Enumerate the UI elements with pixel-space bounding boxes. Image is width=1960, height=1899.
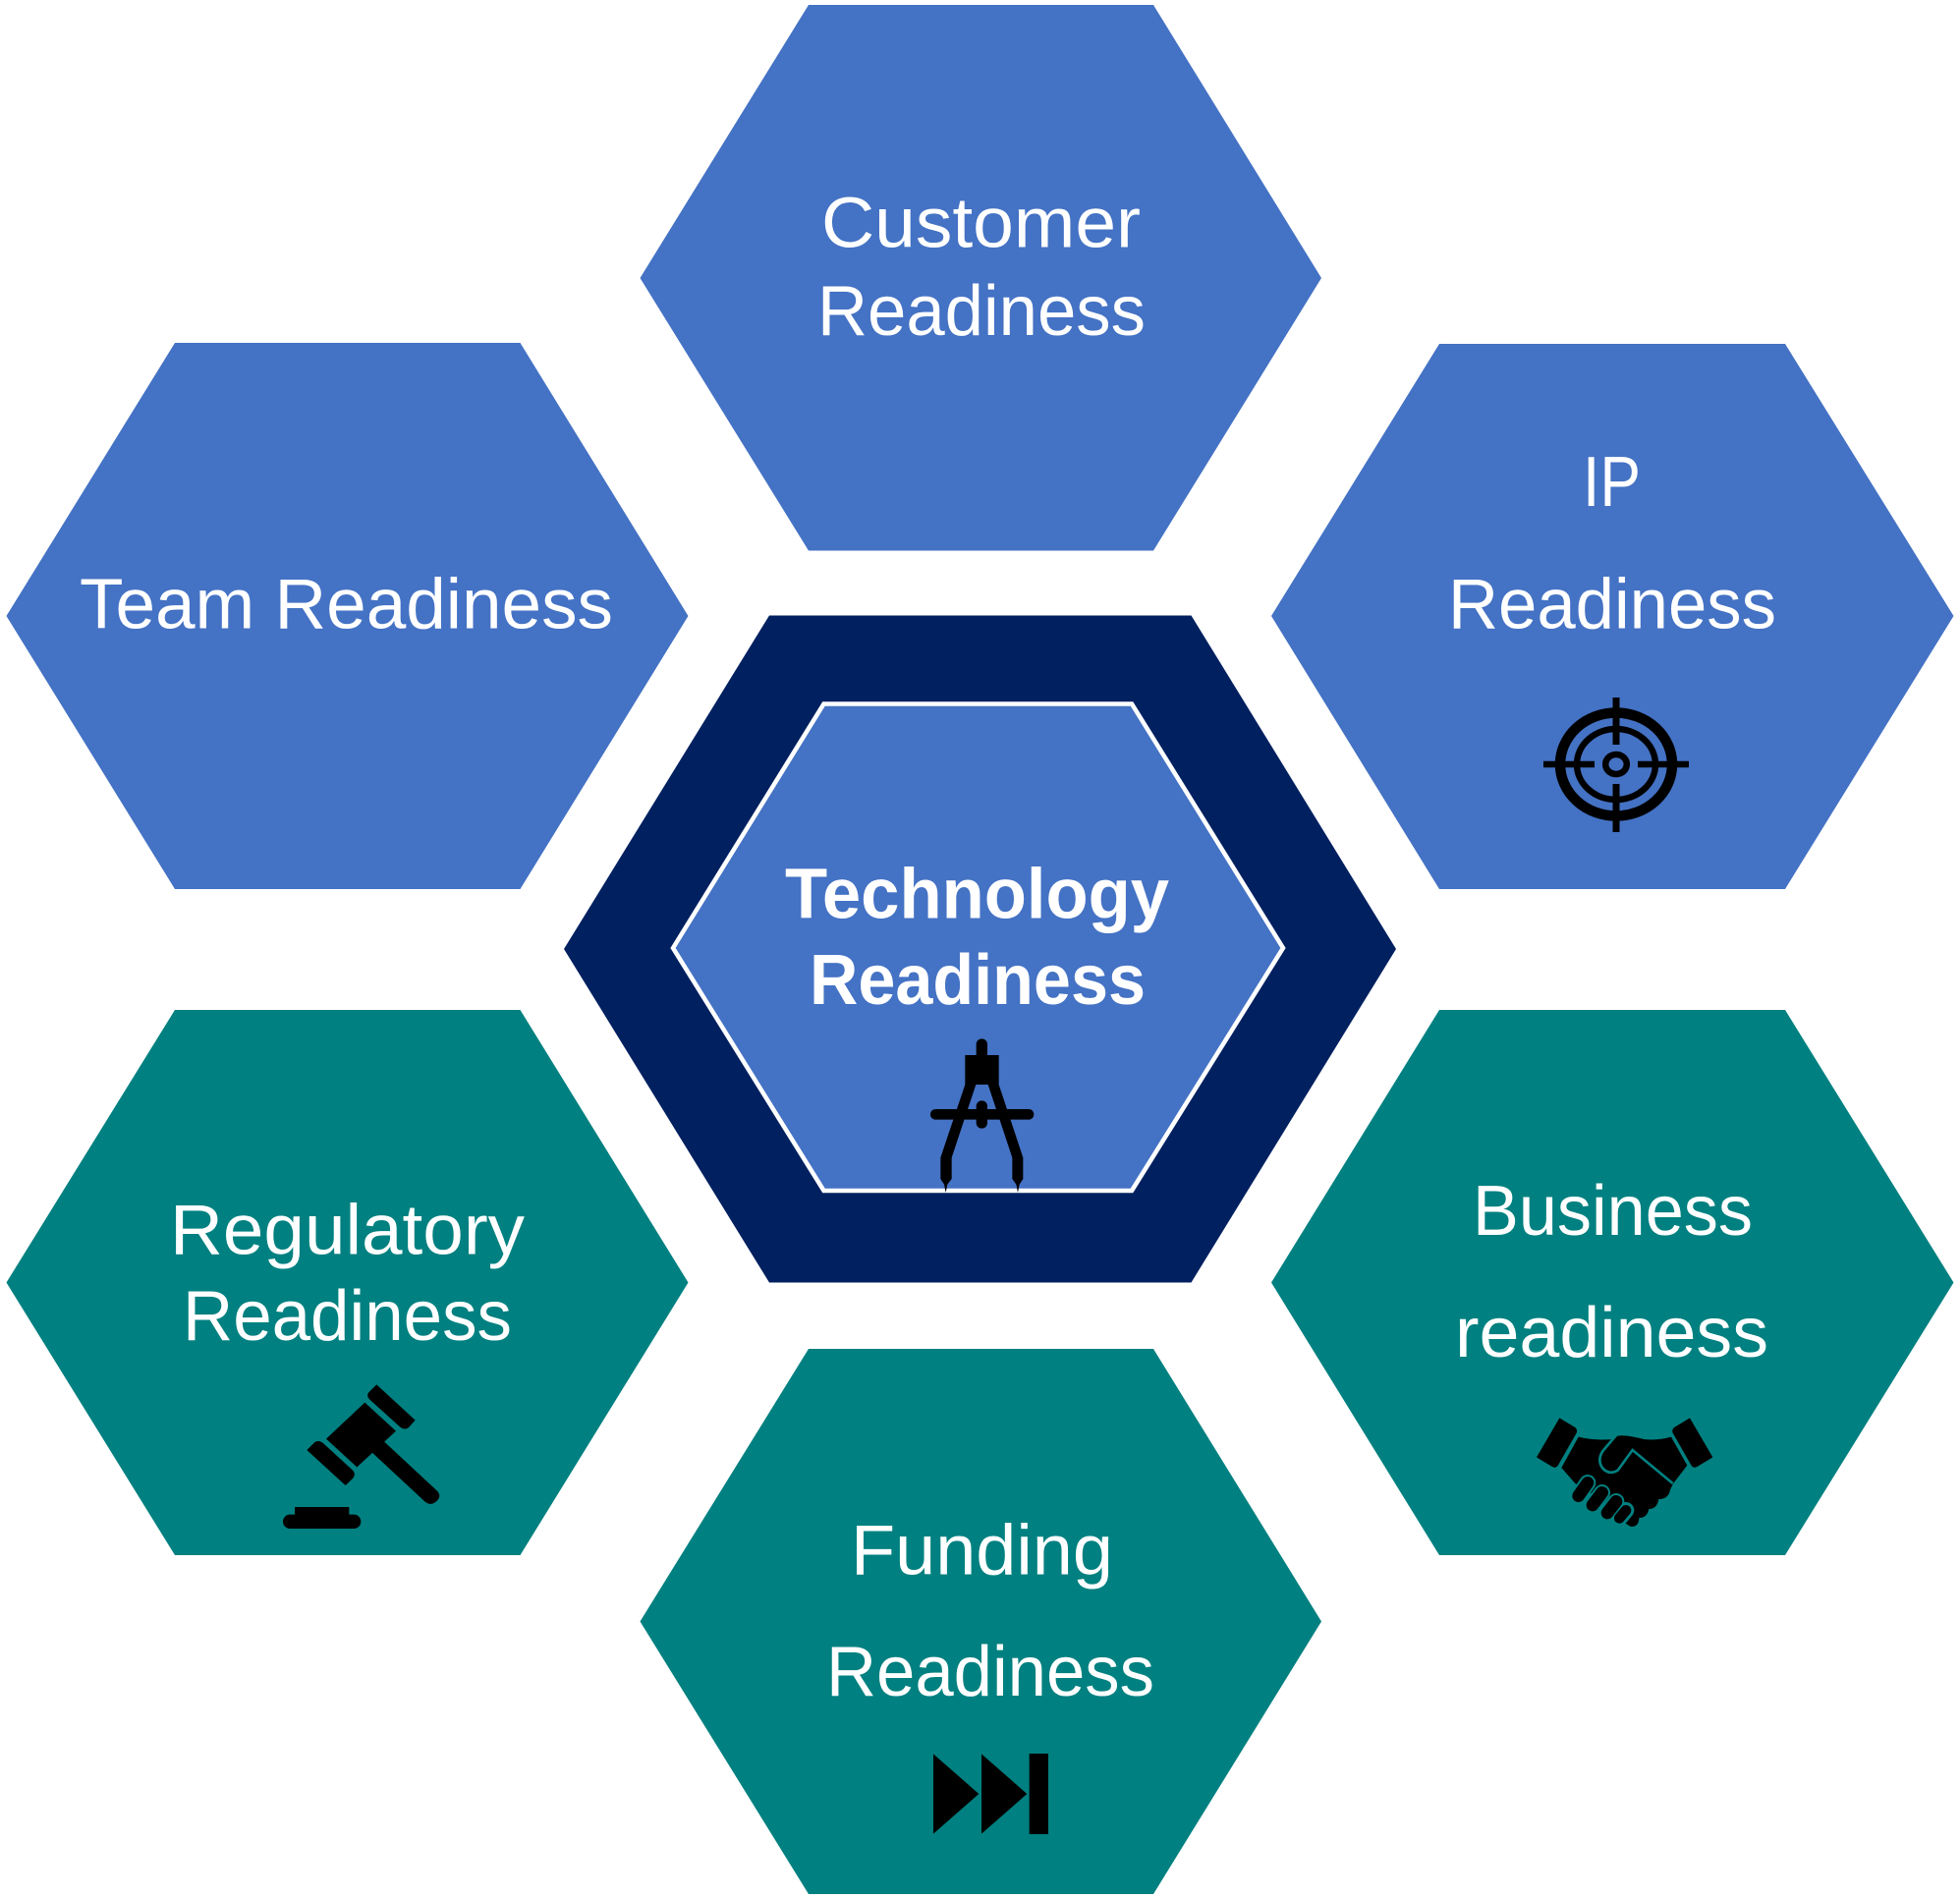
- label: IP readiness: Readiness: [1448, 566, 1776, 644]
- panel: regulatory readiness: [6, 1010, 688, 1555]
- panel: business readiness: [1271, 1010, 1953, 1555]
- label: customer readiness: Customer: [821, 185, 1141, 263]
- label: customer readiness: [817, 185, 1146, 351]
- icon: fast forward: [933, 1754, 1048, 1834]
- panel: technology readiness: [564, 615, 1396, 1283]
- label: business readiness: [1455, 1172, 1768, 1372]
- label: funding readiness: [826, 1511, 1154, 1711]
- icon: target crosshair: [1543, 698, 1689, 832]
- label: funding readiness: Readiness: [826, 1633, 1154, 1711]
- hexagon: IP: [1271, 344, 1953, 889]
- label: business readiness: readiness: [1455, 1294, 1768, 1372]
- hexagon: outer navy: [564, 615, 1396, 1283]
- label: business readiness: Business: [1473, 1172, 1753, 1251]
- label: team readiness: Team Readiness: [80, 566, 613, 644]
- hexagon: customer: [641, 5, 1321, 550]
- panel: customer readiness: [641, 5, 1321, 550]
- label: technology readiness: Technology: [785, 855, 1169, 933]
- panel: funding readiness: [641, 1349, 1321, 1894]
- hexagon: team: [6, 343, 688, 889]
- label: customer readiness: Readiness: [817, 272, 1146, 351]
- panel: team readiness: [6, 343, 688, 889]
- panel: IP readiness: [1271, 344, 1953, 889]
- label: IP readiness: [1448, 443, 1776, 644]
- label: IP readiness: IP: [1583, 443, 1641, 522]
- label: funding readiness: Funding: [851, 1511, 1113, 1590]
- label: regulatory readiness: Readiness: [183, 1277, 512, 1356]
- label: technology readiness: [785, 855, 1169, 1020]
- icon: gavel: [283, 1384, 439, 1529]
- hexagon: inner blue: [673, 703, 1283, 1191]
- hexagon: business: [1271, 1010, 1953, 1555]
- label: technology readiness: Readiness: [810, 941, 1146, 1020]
- label: regulatory readiness: [170, 1191, 525, 1356]
- hexagon: funding: [641, 1349, 1321, 1894]
- icon: drafting compass: [930, 1038, 1034, 1193]
- icon: handshake: [1537, 1418, 1712, 1527]
- label: regulatory readiness: Regulatory: [170, 1191, 525, 1269]
- hexagon: regulatory: [6, 1010, 688, 1555]
